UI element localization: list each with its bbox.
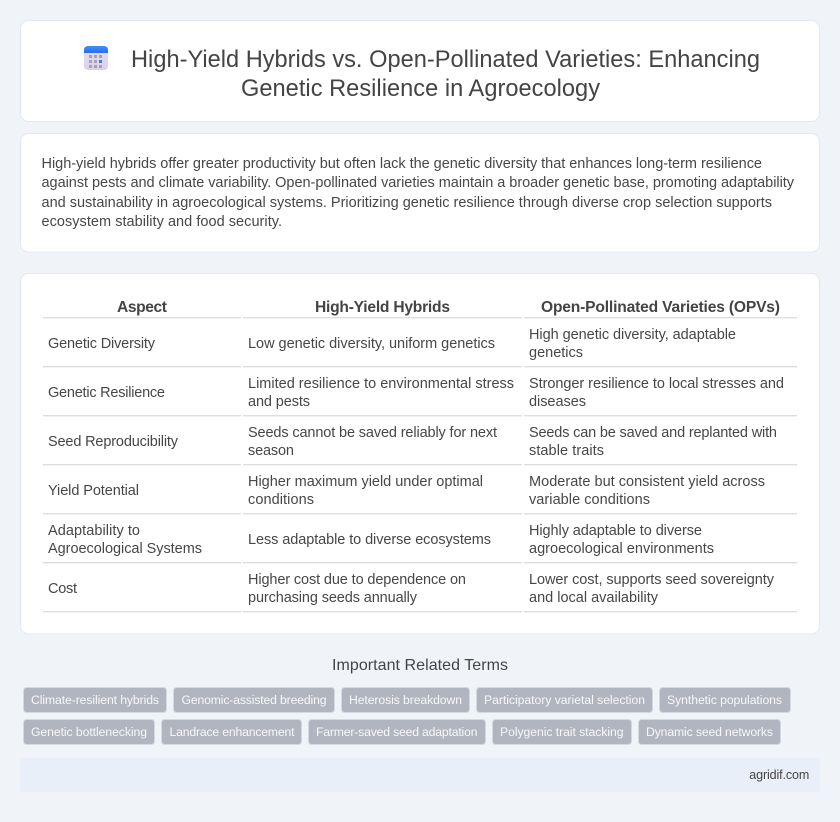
row: yield potential: Yield Potential — [48, 483, 139, 499]
row: genetic diversity: Genetic Diversity — [48, 336, 156, 352]
related terms tags: Dynamic seed networks — [646, 725, 773, 739]
related terms tags: Heterosis breakdown — [349, 693, 462, 707]
row: genetic resilience: Genetic Resilience — [48, 385, 165, 401]
row: cost: Lower cost, supports seed sovereignty — [529, 572, 775, 588]
row: genetic resilience: and pests — [248, 394, 310, 410]
comparison table panel — [20, 274, 820, 634]
related terms tags: Farmer-saved seed adaptation — [316, 725, 478, 739]
title: High-Yield Hybrids vs. Open-Pollinated Varieties: Enhancing — [131, 47, 760, 73]
intro panel — [20, 134, 820, 252]
related terms tags: Synthetic populations — [667, 693, 782, 707]
row: adaptability: Adaptability to — [48, 523, 140, 539]
row: seed reproducibility: Seeds can be saved and replanted with — [529, 425, 777, 441]
row: yield potential — [43, 474, 797, 514]
row: cost: Higher cost due to dependence on — [248, 572, 466, 588]
row: seed reproducibility: Seeds cannot be saved reliably for next — [248, 425, 497, 441]
row: yield potential: Moderate but consistent yield across — [529, 474, 765, 490]
row: genetic resilience — [43, 376, 797, 416]
related terms tags: Polygenic trait stacking — [500, 725, 624, 739]
row: seed reproducibility: season — [248, 443, 294, 459]
table header row: High-Yield Hybrids — [315, 299, 450, 316]
title: Genetic Resilience in Agroecology — [241, 76, 600, 102]
title — [131, 47, 760, 102]
row: adaptability — [43, 523, 797, 563]
footer bar — [20, 758, 820, 792]
related terms tags: Landrace enhancement — [170, 725, 295, 739]
row: yield potential: conditions — [248, 492, 314, 508]
row: genetic resilience: Limited resilience to environmental stress — [248, 376, 514, 392]
row: genetic diversity — [43, 327, 797, 367]
row: yield potential: Higher maximum yield under optimal — [248, 474, 483, 490]
related terms tags: Genomic-assisted breeding — [182, 693, 326, 707]
related terms tags — [24, 688, 790, 744]
related terms tags: Participatory varietal selection — [484, 693, 645, 707]
table header row: Aspect — [117, 299, 167, 316]
row: genetic diversity: High genetic diversity, adaptable — [529, 327, 736, 343]
intro text — [42, 156, 795, 230]
table header row: Open-Pollinated Varieties (OPVs) — [541, 299, 780, 316]
row: seed reproducibility: Seed Reproducibility — [48, 434, 179, 450]
intro text: against pests and climate variability. Open-pollinated varieties maintain a broader genetic base, promoting adaptability — [42, 175, 795, 191]
row: genetic resilience: Stronger resilience to local stresses and — [529, 376, 784, 392]
intro text: and sustainability in agroecological systems. Prioritizing genetic resilience through diverse crop selection supports — [42, 195, 772, 211]
row: adaptability: Less adaptable to diverse ecosystems — [248, 532, 491, 548]
table header row — [43, 299, 797, 318]
row: genetic diversity: genetics — [529, 345, 583, 361]
row: adaptability: Agroecological Systems — [48, 541, 202, 557]
related terms tags: Genetic bottlenecking — [31, 725, 147, 739]
header panel — [20, 20, 820, 122]
row: cost: purchasing seeds annually — [248, 590, 418, 606]
row: genetic diversity: Low genetic diversity, uniform genetics — [248, 336, 495, 352]
row: seed reproducibility — [43, 425, 797, 465]
related terms tags: Climate-resilient hybrids — [31, 693, 159, 707]
row: cost: and local availability — [529, 590, 659, 606]
row: cost: Cost — [48, 581, 77, 597]
related terms heading: Important Related Terms — [332, 657, 508, 674]
intro text: High-yield hybrids offer greater productivity but often lack the genetic diversity that enhances long-term resilience — [42, 156, 762, 172]
row: seed reproducibility: stable traits — [529, 443, 604, 459]
row: genetic resilience: diseases — [529, 394, 586, 410]
row: cost — [43, 572, 797, 612]
row: adaptability: Highly adaptable to diverse — [529, 523, 702, 539]
icon: calendar — [84, 46, 108, 70]
footer source: agridif.com — [749, 768, 809, 782]
row: adaptability: agroecological environments — [529, 541, 714, 557]
intro text: ecosystem stability and food security. — [42, 214, 282, 230]
row: yield potential: variable conditions — [529, 492, 650, 508]
